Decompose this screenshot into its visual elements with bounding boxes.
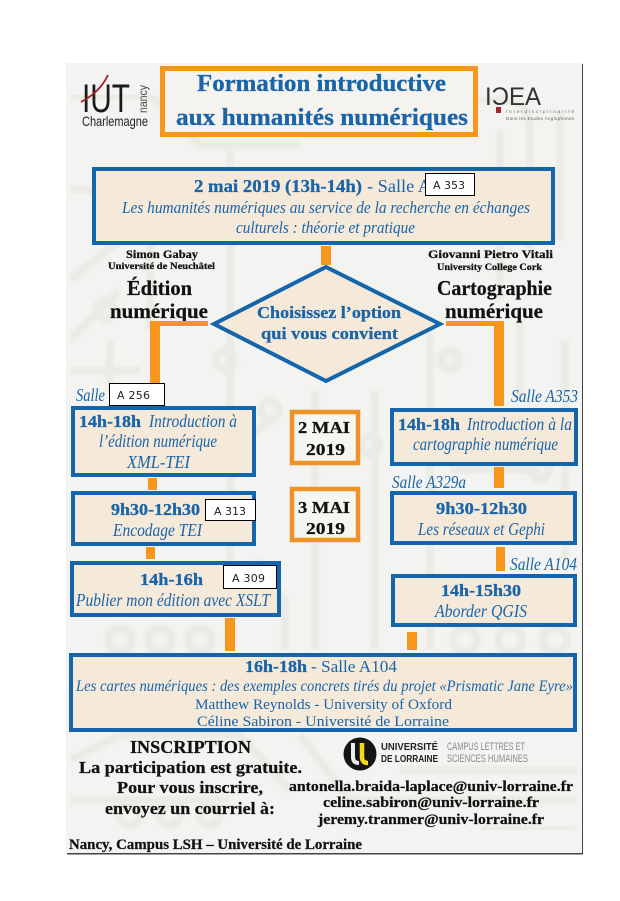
panel: édition session 3: 14h-16h (140, 570, 204, 589)
heading: Cartographie numérique: numérique (445, 299, 543, 323)
panel: édition session 1 (73, 408, 254, 475)
text: inscription: INSCRIPTION (130, 737, 251, 757)
logo: Université de Lorraine: SCIENCES HUMAINES (447, 753, 528, 765)
panel: édition session 2: Encodage TEI (112, 520, 203, 540)
speaker: Simon Gabay (108, 247, 215, 272)
label: A 313: A 313 (214, 505, 246, 518)
logo: IUT Charlemagne: IUT (82, 77, 130, 121)
connector: conference to diamond (321, 246, 331, 265)
panel: opening lecture: - Salle A (367, 176, 431, 196)
text: inscription: La participation est gratuite. (79, 758, 302, 777)
connector: left to final session (225, 618, 235, 651)
text: inscription: envoyez un courriel à: (105, 799, 275, 818)
panel: opening lecture (94, 169, 553, 243)
panel: final session: Matthew Reynolds - University of Oxford (195, 697, 452, 713)
panel: édition session 1: 14h-18h (79, 412, 142, 431)
text: location: Nancy, Campus LSH – Université de Lorraine (69, 837, 362, 853)
panel: édition session 1: XML-TEI (126, 452, 191, 472)
heading: Cartographie numérique: Cartographie (437, 276, 552, 300)
panel: édition session 1: Introduction à (148, 411, 237, 431)
panel: cartographie session 3: Aborder QGIS (434, 601, 527, 621)
diamond: choose option: qui vous convient (261, 324, 398, 343)
logo: IUT Charlemagne: Charlemagne (82, 113, 148, 129)
room: Salle A329a: Salle A329a (392, 472, 466, 492)
panel: cartographie session 2: Les réseaux et Gephi (417, 519, 545, 539)
room: Salle A 256: Salle (76, 385, 105, 405)
date: 2 mai 2019 (292, 412, 358, 463)
connector: left 2 to 3 (146, 547, 155, 559)
room: Salle A 256 (76, 384, 164, 406)
panel: cartographie session 2: 9h30-12h30 (436, 499, 527, 518)
logo: IDEA: Dans les Etudes Anglophones (506, 116, 575, 121)
panel: édition session 3 (72, 563, 279, 615)
panel: cartographie session 1: cartographie numérique (413, 434, 558, 454)
connector: left branch (150, 321, 208, 384)
title: Formation introductive (197, 71, 446, 97)
panel: cartographie session 1 (392, 410, 576, 464)
logo: IUT Charlemagne: nancy (136, 85, 150, 113)
panel: cartographie session 3 (393, 576, 575, 625)
label: A 309 (224, 566, 276, 588)
panel: cartographie session 1: 14h-18h (398, 415, 461, 434)
logo: Université de Lorraine (344, 738, 528, 770)
room: Salle A353: Salle A353 (511, 386, 578, 406)
panel: final session: Les cartes numériques : des exemples concrets tirés du projet «Prismatic Jane Eyre» (75, 678, 573, 695)
speaker: Giovanni Pietro Vitali (428, 247, 554, 273)
text: contact emails (289, 779, 573, 828)
panel: opening lecture: Les humanités numériques au service de la recherche en échanges (121, 198, 530, 217)
diamond: choose option: Choisissez l’option (257, 303, 402, 322)
panel: édition session 3: Publier mon édition avec XSLT (75, 590, 272, 610)
connector: right branch (446, 321, 504, 406)
panel: final session: 16h-18h (245, 657, 308, 676)
speaker: Giovanni Pietro Vitali: University College Cork (437, 263, 543, 273)
panel: édition session 2: 9h30-12h30 (111, 500, 200, 519)
text: contact emails: jeremy.tranmer@univ-lorraine.fr (317, 812, 544, 828)
text: inscription (79, 737, 302, 818)
date: 2 mai 2019: 2 MAI (298, 418, 350, 437)
date: 3 mai 2019 (292, 489, 358, 540)
title (162, 68, 476, 134)
logo: Université de Lorraine: UNIVERSITÉ (381, 740, 438, 753)
speaker: Giovanni Pietro Vitali: Giovanni Pietro Vitali (428, 247, 554, 261)
room: Salle A 256: A 256 (117, 389, 150, 402)
heading: Édition numérique: numérique (110, 299, 208, 323)
connector: right to final session (407, 632, 417, 650)
label: A 353: A 353 (433, 179, 465, 192)
label: A 313 (206, 500, 256, 520)
panel: opening lecture: culturels : théorie et pratique (236, 218, 415, 237)
panel: cartographie session 3: 14h-15h30 (441, 581, 521, 600)
logo: Université de Lorraine: DE LORRAINE (381, 753, 438, 765)
date: 2 mai 2019: 2019 (306, 440, 345, 459)
panel: cartographie session 1: Introduction à la (466, 414, 572, 434)
panel: édition session 1: l’édition numérique (99, 431, 217, 451)
poster background with circuit pattern (66, 63, 583, 854)
text: contact emails: celine.sabiron@univ-lorraine.fr (323, 795, 539, 811)
label: A 353 (426, 174, 474, 196)
heading: Édition numérique (110, 276, 208, 323)
logo: IDEA (485, 83, 575, 121)
connector: left 1 to 2 (148, 478, 157, 490)
title: aux humanités numériques (176, 105, 468, 131)
logo: IDEA: Interdisciplinarité (506, 109, 574, 114)
text: contact emails: antonella.braida-laplace@univ-lorraine.fr (289, 779, 573, 795)
text: inscription: Pour vous inscrire, (117, 778, 263, 797)
date: 3 mai 2019: 3 MAI (298, 498, 350, 517)
diamond: choose option (214, 267, 440, 381)
panel: final session: - Salle A104 (311, 657, 397, 676)
room: Salle A104: Salle A104 (510, 554, 577, 574)
panel: final session: Céline Sabiron - Université de Lorraine (197, 714, 449, 730)
label: A 309: A 309 (232, 572, 265, 585)
panel: opening lecture: 2 mai 2019 (13h-14h) (194, 176, 362, 197)
logo: IDEA: IƆEA (485, 83, 541, 111)
heading: Édition numérique: Édition (127, 276, 192, 300)
connector: right 1 to 2 (494, 467, 504, 488)
speaker: Simon Gabay: Université de Neuchâtel (108, 262, 215, 272)
panel: final session (71, 655, 575, 730)
connector: right 2 to 3 (496, 547, 505, 571)
logo: Université de Lorraine: CAMPUS LETTRES ET (447, 741, 525, 753)
panel: édition session 2 (73, 493, 256, 544)
speaker: Simon Gabay: Simon Gabay (126, 247, 198, 261)
date: 3 mai 2019: 2019 (306, 519, 345, 538)
panel: cartographie session 2 (392, 493, 575, 543)
heading: Cartographie numérique (437, 276, 552, 323)
